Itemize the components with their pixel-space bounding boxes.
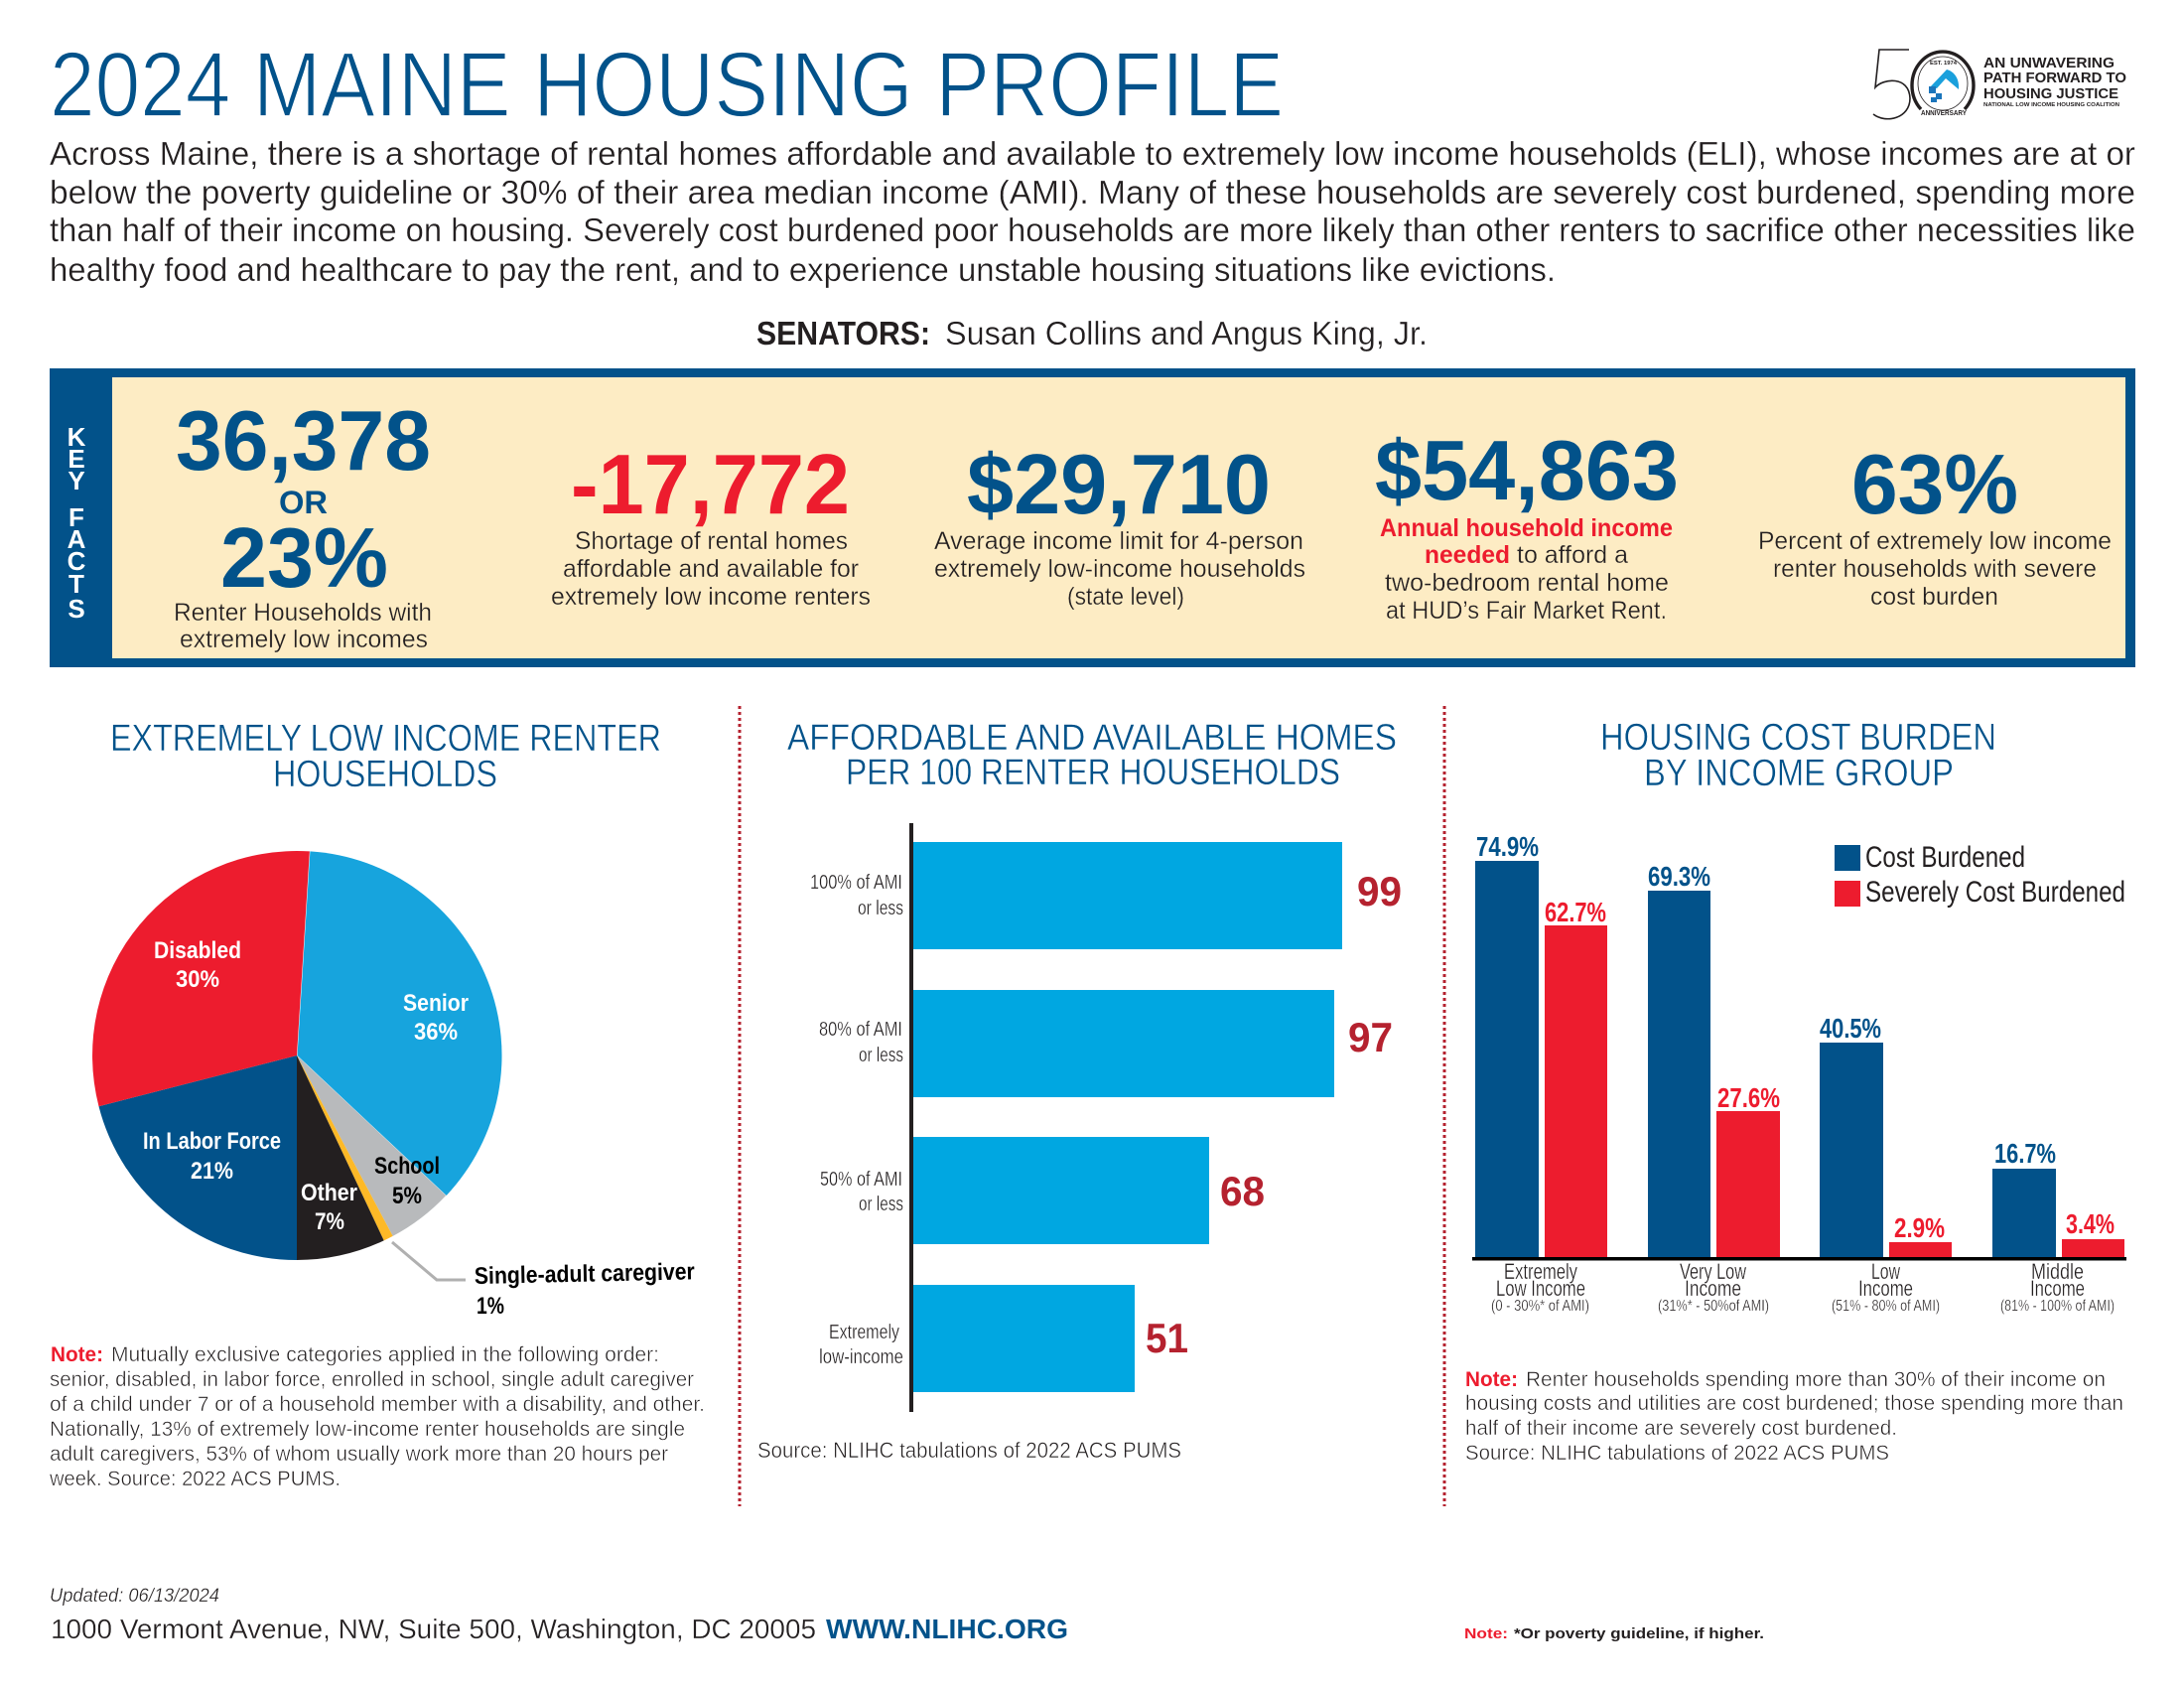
key facts frame <box>50 368 2135 667</box>
bar: 80% of AMI: 80% of AMI <box>819 1019 902 1041</box>
key facts vertical label: K <box>68 422 86 452</box>
fact: annual household income needed: Annual household income <box>1380 514 1673 542</box>
group: very low income <box>1648 861 1780 1315</box>
slice: single-adult caregiver <box>297 1055 393 1240</box>
fact: renter households with extremely low incomes: 23% <box>220 511 388 606</box>
heading: HOUSING COST BURDEN <box>1600 717 1996 759</box>
heading <box>1600 717 1996 794</box>
bar: 50% of AMI: 50% of AMI <box>820 1169 902 1191</box>
grouped bar chart <box>1472 831 2126 1315</box>
footer: address and website: WWW.NLIHC.ORG <box>826 1614 1068 1644</box>
footer: address and website: 1000 Vermont Avenue, NW, Suite 500, Washington, DC 20005 <box>51 1614 816 1644</box>
group: very low income: 69.3% <box>1648 861 1710 892</box>
heading: AFFORDABLE AND AVAILABLE HOMES <box>787 717 1397 758</box>
fact: renter households with extremely low incomes: Renter Households with <box>174 599 432 627</box>
slice: other <box>297 1055 384 1260</box>
senators line: Susan Collins and Angus King, Jr. <box>945 315 1428 352</box>
x axis <box>1472 1257 2126 1261</box>
note: week. Source: 2022 ACS PUMS. <box>49 1468 341 1490</box>
fact: annual household income needed <box>1375 424 1679 625</box>
bar: 50% of AMI <box>820 1137 1265 1244</box>
fact: shortage of rental homes: affordable and available for <box>563 555 859 583</box>
group: middle income: (81% - 100% of AMI) <box>2000 1298 2115 1315</box>
key facts background <box>112 377 2125 658</box>
bar: 50% of AMI: or less <box>859 1194 903 1215</box>
note: Mutually exclusive categories applied in the following order: <box>111 1343 659 1366</box>
group: low income: 2.9% <box>1894 1212 1945 1243</box>
logo established text: EST. 1974 <box>1930 61 1958 67</box>
fact: average income limit: Average income limit for 4-person <box>934 527 1303 555</box>
panel: affordable and available homes <box>757 717 1402 1463</box>
bar: 80% of AMI <box>819 990 1393 1097</box>
key facts vertical label: C <box>68 546 86 576</box>
bar: 100% of AMI <box>810 842 1402 949</box>
fact: shortage of rental homes <box>551 438 871 611</box>
key facts vertical label: S <box>68 594 85 624</box>
group: extremely low income: Extremely <box>1504 1259 1577 1284</box>
footer: updated date: Updated: 06/13/2024 <box>50 1586 219 1607</box>
logo tagline: PATH FORWARD TO <box>1983 70 2126 86</box>
bar: 100% of AMI: 99 <box>1357 868 1402 914</box>
group: very low income: Income <box>1685 1276 1741 1301</box>
fact: annual household income needed: two-bedroom rental home <box>1385 569 1669 597</box>
key facts vertical label: E <box>68 444 85 474</box>
panel: housing cost burden <box>1465 717 2126 1465</box>
intro paragraph: Across Maine, there is a shortage of rental homes affordable and available to extremely low income households (ELI), whose incomes are at or <box>50 135 2135 172</box>
bar: 50% of AMI: 68 <box>1220 1168 1265 1214</box>
fact: average income limit: (state level) <box>1067 583 1184 611</box>
senators line: SENATORS: <box>756 315 930 352</box>
footer: poverty guideline note: Note: <box>1464 1625 1508 1642</box>
intro paragraph: below the poverty guideline or 30% of their area median income (AMI). Many of these households are severely cost burdened, spending more <box>50 174 2135 211</box>
fact: renter households with extremely low incomes: OR <box>279 485 328 520</box>
slice: disabled <box>92 851 310 1106</box>
heading <box>110 718 661 795</box>
group: low income <box>1820 1013 1952 1315</box>
bar: 100% of AMI: 100% of AMI <box>810 872 902 894</box>
group: low income: Low <box>1871 1259 1900 1284</box>
note: Note: <box>51 1343 103 1366</box>
group: low income: (51% - 80% of AMI) <box>1832 1298 1940 1315</box>
group: very low income: (31%* - 50%of AMI) <box>1658 1298 1769 1315</box>
note: Renter households spending more than 30% of their income on <box>1526 1368 2106 1391</box>
pie label: school: 5% <box>392 1183 422 1209</box>
group: extremely low income: 74.9% <box>1476 831 1539 862</box>
group: middle income: Income <box>2030 1276 2085 1301</box>
group: very low income: Very Low <box>1680 1259 1746 1284</box>
fact: annual household income needed: at HUD’s Fair Market Rent. <box>1386 597 1667 625</box>
group: middle income: 16.7% <box>1994 1138 2056 1169</box>
group: middle income <box>1992 1138 2124 1315</box>
pie chart <box>92 851 695 1320</box>
fact: severe cost burden: renter households with severe <box>1773 555 2097 583</box>
bar: extremely low-income: Extremely <box>829 1322 899 1343</box>
slice: school <box>297 1055 446 1236</box>
legend: Cost Burdened <box>1865 841 2025 874</box>
fact: renter households with extremely low incomes <box>174 394 432 653</box>
logo house icon <box>1929 70 1959 102</box>
intro paragraph <box>50 135 2135 288</box>
fact: severe cost burden: cost burden <box>1870 583 1998 611</box>
key facts vertical label <box>68 422 86 624</box>
fact: average income limit: $29,710 <box>967 438 1271 532</box>
logo anniversary ring <box>1912 52 1974 110</box>
logo tagline: NATIONAL LOW INCOME HOUSING COALITION <box>1983 102 2119 108</box>
pie label: senior: Senior <box>403 990 469 1017</box>
group: extremely low income: (0 - 30%* of AMI) <box>1491 1298 1589 1315</box>
axis <box>909 823 913 1412</box>
pie label: senior <box>403 990 469 1046</box>
fact: shortage of rental homes: extremely low income renters <box>551 583 871 611</box>
logo tagline <box>1983 56 2126 108</box>
key facts vertical label: A <box>68 524 86 554</box>
logo tagline: AN UNWAVERING <box>1983 56 2115 71</box>
bar: extremely low-income: low-income <box>819 1346 903 1368</box>
bar: 100% of AMI: or less <box>858 898 903 919</box>
pie label: in labor force <box>143 1128 281 1185</box>
note: Source: NLIHC tabulations of 2022 ACS PUMS <box>1465 1442 1889 1465</box>
slice: in labor force <box>99 1055 297 1260</box>
pie label: in labor force: In Labor Force <box>143 1128 281 1155</box>
fact: severe cost burden: Percent of extremely low income <box>1758 527 2112 555</box>
heading: PER 100 RENTER HOUSEHOLDS <box>846 752 1340 792</box>
pie label: in labor force: 21% <box>191 1158 233 1185</box>
pie label: other <box>301 1180 357 1235</box>
key facts vertical label: F <box>68 502 84 532</box>
title: 2024 MAINE HOUSING PROFILE <box>50 33 1284 136</box>
heading <box>787 717 1397 792</box>
note: Note: <box>1465 1368 1518 1391</box>
panel: extremely low income renter households <box>49 718 705 1490</box>
fact: annual household income needed: $54,863 <box>1375 424 1679 518</box>
group: middle income: Middle <box>2031 1259 2084 1284</box>
pie label: other: 7% <box>315 1208 344 1235</box>
fact: renter households with extremely low incomes: 36,378 <box>176 394 431 489</box>
fact: average income limit: extremely low-income households <box>934 555 1305 583</box>
group: very low income: 27.6% <box>1717 1082 1780 1113</box>
fact: renter households with extremely low incomes: extremely low incomes <box>180 626 428 653</box>
fact: severe cost burden <box>1758 438 2112 611</box>
slice: senior <box>298 851 502 1196</box>
pie label: school: School <box>374 1153 440 1180</box>
note: Nationally, 13% of extremely low-income renter households are single <box>50 1418 685 1441</box>
bar: 80% of AMI: or less <box>859 1045 903 1066</box>
fact: shortage of rental homes: Shortage of rental homes <box>575 527 848 555</box>
bar: 80% of AMI: 97 <box>1348 1014 1393 1060</box>
legend: Severely Cost Burdened <box>1865 876 2125 909</box>
footer: poverty guideline note: *Or poverty guideline, if higher. <box>1514 1625 1764 1642</box>
logo tagline: HOUSING JUSTICE <box>1983 86 2118 102</box>
fact: annual household income needed: to afford a <box>1517 541 1628 569</box>
pie label: single-adult caregiver: 1% <box>477 1293 504 1320</box>
logo anniversary text: ANNIVERSARY <box>1921 110 1967 117</box>
note <box>49 1343 705 1490</box>
fact: severe cost burden: 63% <box>1851 438 2018 532</box>
key facts vertical label: T <box>68 569 84 599</box>
pie label: single-adult caregiver: Single-adult caregiver <box>475 1258 695 1290</box>
leader line <box>392 1242 466 1280</box>
note: of a child under 7 or of a household member with a disability, and other. <box>50 1393 705 1416</box>
fact: shortage of rental homes: -17,772 <box>571 438 850 532</box>
note: adult caregivers, 53% of whom usually work more than 20 hours per <box>50 1443 668 1466</box>
intro paragraph: healthy food and healthcare to pay the rent, and to experience unstable housing situations like evictions. <box>50 251 1556 288</box>
source: Source: NLIHC tabulations of 2022 ACS PUMS <box>757 1438 1181 1463</box>
pie label: other: Other <box>301 1180 357 1206</box>
heading: EXTREMELY LOW INCOME RENTER <box>110 718 661 760</box>
note: half of their income are severely cost burdened. <box>1465 1417 1897 1440</box>
note <box>1465 1368 2123 1465</box>
note: housing costs and utilities are cost burdened; those spending more than <box>1465 1392 2123 1415</box>
intro paragraph: than half of their income on housing. Severely cost burdened poor households are more likely than other renters to sacrifice other necessities like <box>50 211 2135 248</box>
note: senior, disabled, in labor force, enrolled in school, single adult caregiver <box>50 1368 694 1391</box>
legend <box>1835 841 2125 909</box>
pie label: school <box>374 1153 440 1209</box>
heading: BY INCOME GROUP <box>1644 753 1954 794</box>
pie label: single-adult caregiver <box>475 1258 695 1320</box>
bar: extremely low-income <box>819 1285 1188 1392</box>
group: low income: Income <box>1858 1276 1913 1301</box>
logo: NLIHC 50th anniversary <box>1873 50 2126 119</box>
bar chart <box>810 823 1402 1412</box>
pie label: disabled <box>154 937 241 993</box>
bar: extremely low-income: 51 <box>1146 1315 1188 1361</box>
group: extremely low income: Low Income <box>1496 1276 1585 1301</box>
group: middle income: 3.4% <box>2066 1208 2115 1239</box>
pie label: disabled: 30% <box>176 966 219 993</box>
key facts vertical label: Y <box>68 466 85 495</box>
pie label: disabled: Disabled <box>154 937 241 964</box>
heading: HOUSEHOLDS <box>273 754 497 795</box>
panel: key facts <box>50 368 2135 667</box>
pie label: senior: 36% <box>414 1019 458 1046</box>
group: extremely low income: 62.7% <box>1545 897 1606 927</box>
group: low income: 40.5% <box>1820 1013 1881 1044</box>
fact: average income limit <box>934 438 1305 611</box>
group: extremely low income <box>1475 831 1607 1315</box>
fact: annual household income needed: needed <box>1425 541 1510 569</box>
logo numeral five <box>1873 50 1910 119</box>
